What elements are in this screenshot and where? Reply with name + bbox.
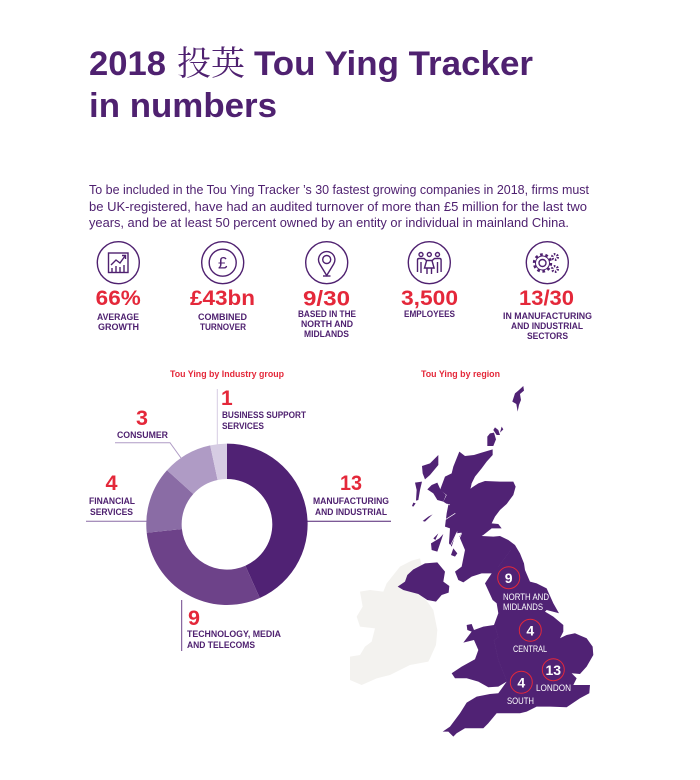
icon: gears (526, 242, 568, 284)
stat: employees (401, 242, 458, 319)
segment: business support services (210, 444, 227, 480)
segment: manufacturing and industrial (227, 444, 308, 598)
donut chart (146, 444, 308, 605)
callout: consumer: CONSUMER (117, 430, 168, 440)
region marker: south (507, 671, 534, 706)
label (97, 312, 139, 332)
region marker: central: CENTRAL (513, 644, 547, 654)
label: MIDLANDS (304, 329, 349, 339)
intro text: years, and be at least 50 percent owned by an entity or individual in mainland China. (89, 215, 569, 230)
segment: consumer (167, 445, 218, 494)
heading: industry group: Tou Ying by Industry group (170, 369, 284, 379)
icon: people (408, 242, 450, 284)
callout: financial services (86, 472, 147, 521)
callout: business support services: BUSINESS SUPPORT (222, 410, 306, 420)
callout: technology, media and telecoms: AND TELECOMS (187, 640, 255, 650)
region marker: south: SOUTH (507, 696, 534, 706)
region marker: central: 4 (526, 622, 534, 638)
national borders (494, 550, 511, 681)
Orkney (487, 427, 503, 446)
label: EMPLOYEES (404, 309, 455, 319)
stat: combined turnover (190, 242, 255, 332)
Uists (412, 482, 422, 507)
intro text: To be included in the Tou Ying Tracker ’s 30 fastest growing companies in 2018, firms must (89, 182, 589, 197)
callout: technology, media and telecoms (182, 600, 281, 651)
region marker: north and midlands: MIDLANDS (503, 602, 543, 612)
callout: business support services: 1 (221, 387, 233, 410)
label: AVERAGE (97, 312, 139, 322)
value: 13/30 (519, 287, 574, 310)
title: Tou Ying Tracker (254, 45, 533, 83)
title: 投英 (177, 45, 245, 83)
Lewis and Harris (422, 455, 438, 479)
label (298, 309, 356, 339)
label: AND INDUSTRIAL (511, 321, 583, 331)
callout: business support services (217, 387, 306, 445)
title: in numbers (89, 87, 277, 125)
value: 9/30 (303, 288, 350, 310)
icon: location pin (306, 242, 348, 284)
segment: technology, media and telecoms (147, 529, 260, 605)
callout: business support services: SERVICES (222, 421, 264, 431)
label: GROWTH (98, 322, 139, 332)
region marker: london: LONDON (536, 683, 571, 693)
region marker: north and midlands: NORTH AND (503, 592, 549, 602)
label (503, 311, 592, 341)
region marker: north and midlands (498, 567, 549, 612)
label (198, 312, 247, 332)
region marker: central (513, 619, 547, 654)
callout: manufacturing and industrial (307, 472, 391, 521)
map: UK and Ireland (350, 386, 593, 737)
region marker: north and midlands: 9 (505, 570, 513, 586)
callout: manufacturing and industrial: MANUFACTURING (313, 496, 389, 506)
Scottish islands (412, 386, 524, 557)
callout: consumer (115, 407, 181, 458)
heading: region: Tou Ying by region (421, 369, 500, 379)
value: 3,500 (401, 287, 458, 310)
callout: manufacturing and industrial: AND INDUSTRIAL (315, 507, 387, 517)
title (89, 45, 533, 125)
label: COMBINED (198, 312, 247, 322)
value: £43bn (190, 287, 255, 310)
stat: average growth (96, 242, 141, 332)
Mull, Jura, Kintyre and Arran (423, 514, 457, 557)
intro text (89, 182, 589, 230)
stat: manufacturing and industrial (503, 242, 592, 341)
label: NORTH AND (301, 319, 353, 329)
Great Britain (440, 449, 593, 737)
callout: financial services: SERVICES (90, 507, 133, 517)
Skye (427, 483, 446, 502)
title: 2018 (89, 45, 166, 83)
callout: financial services: 4 (106, 472, 118, 495)
Northern Ireland (398, 562, 449, 602)
Ireland (350, 558, 437, 685)
region marker: london (536, 659, 571, 693)
icon: growth chart (97, 242, 139, 284)
label: IN MANUFACTURING (503, 311, 592, 321)
callout: technology, media and telecoms: TECHNOLOGY, MEDIA (187, 629, 281, 639)
callout: consumer: 3 (136, 407, 148, 430)
label: SECTORS (527, 331, 568, 341)
callout: technology, media and telecoms: 9 (188, 607, 200, 630)
callout: financial services: FINANCIAL (89, 496, 135, 506)
region marker: south: 4 (517, 674, 525, 690)
label: TURNOVER (200, 322, 246, 332)
icon: pound coin: £ (218, 254, 228, 272)
segment: financial services (146, 470, 193, 533)
Shetland (512, 386, 524, 412)
stat: north and midlands (298, 242, 356, 339)
region marker: london: 13 (546, 662, 561, 678)
sea lochs (441, 477, 480, 550)
callout: manufacturing and industrial: 13 (340, 472, 362, 495)
intro text: be UK-registered, have had an audited turnover of more than £5 million for the last two (89, 199, 587, 214)
value: 66% (96, 287, 141, 310)
label: BASED IN THE (298, 309, 356, 319)
